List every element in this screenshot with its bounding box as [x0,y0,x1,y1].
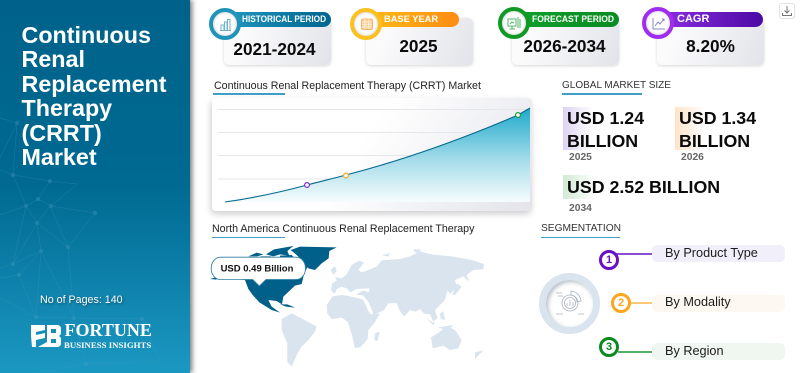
title: Therapy [22,95,112,121]
Islands [331,249,483,359]
title: (CRRT) [22,120,102,146]
stat: USD 1.24 billion 2025: BILLION [567,131,638,151]
icon: chart screen [508,17,520,30]
logo [31,320,152,350]
segment 3: by region: By Region [665,344,724,358]
segment 3: by region [599,337,785,360]
Australia [431,326,462,350]
sidebar panel [0,0,190,373]
segmentation hub icon [539,273,600,334]
stat: CAGR [642,7,766,68]
icon: download [779,3,795,19]
stat: USD 1.34 billion 2026 [675,107,756,163]
Eurasia [331,252,484,322]
icon: logo mark [31,325,61,347]
title [22,22,167,170]
stat: base year [350,8,474,68]
stat: USD 1.24 billion 2025: 2025 [569,152,592,163]
title: Replacement [22,70,167,96]
stat: historical period: HISTORICAL PERIOD [242,14,326,25]
title: Renal [22,46,85,72]
segment 1: by product type: By Product Type [665,246,758,260]
icon: bar chart [220,19,231,31]
segment 2: by modality: 2 [618,297,624,309]
segment 1: by product type: 1 [606,254,612,266]
segment 2: by modality: By Modality [665,295,731,309]
stat: USD 1.34 billion 2026: 2026 [681,152,704,163]
title: Continuous [22,22,151,48]
brand name: FORTUNE [64,320,152,340]
stat: USD 2.52 billion 2034 [563,175,720,214]
stat: CAGR: 8.20% [686,36,735,56]
world map [210,246,484,366]
heading: north america map: North America Continuous Renal Replacement Therapy [212,223,474,235]
page count: No of Pages: 140 [40,294,123,306]
stat: forecast period [498,7,620,68]
North America highlight [210,246,337,313]
stat: USD 2.52 billion 2034: USD 2.52 BILLION [567,177,720,197]
icon: growth chart [652,18,665,30]
heading: market chart: Continuous Renal Replacement Therapy (CRRT) Market [214,80,481,92]
heading: global market size: GLOBAL MARKET SIZE [562,80,671,90]
segment 2: by modality [611,293,785,313]
stat: historical period: 2021-2024 [233,39,316,59]
stat: historical period [209,8,332,68]
area fill [225,108,530,202]
stat: USD 1.24 billion 2025: USD 1.24 [567,108,644,128]
stat: forecast period: FORECAST PERIOD [532,14,614,25]
stat: forecast period: 2026-2034 [523,36,606,56]
Africa [327,295,380,348]
stat: CAGR: CAGR [677,13,709,25]
area chart [212,98,532,211]
segment 3: by region: 3 [606,341,612,353]
stat: USD 1.34 billion 2026: USD 1.34 [679,108,756,128]
callout: North America value: USD 0.49 Billion [221,264,294,275]
segment 1: by product type [599,245,785,270]
stat: base year: 2025 [399,36,438,56]
stat: USD 1.34 billion 2026: BILLION [679,131,750,151]
title: Market [22,144,97,170]
network pattern [0,118,160,373]
stat: USD 2.52 billion 2034: 2034 [569,203,592,214]
callout: North America value [211,257,306,286]
South America [282,313,317,367]
heading: segmentation: SEGMENTATION [541,223,621,234]
icon: calendar [361,18,373,30]
stat: base year: BASE YEAR [384,14,438,24]
data points [305,113,520,187]
trend line [225,108,530,202]
stat: USD 1.24 billion 2025 [563,107,644,163]
brand tagline: BUSINESS INSIGHTS [64,340,151,350]
